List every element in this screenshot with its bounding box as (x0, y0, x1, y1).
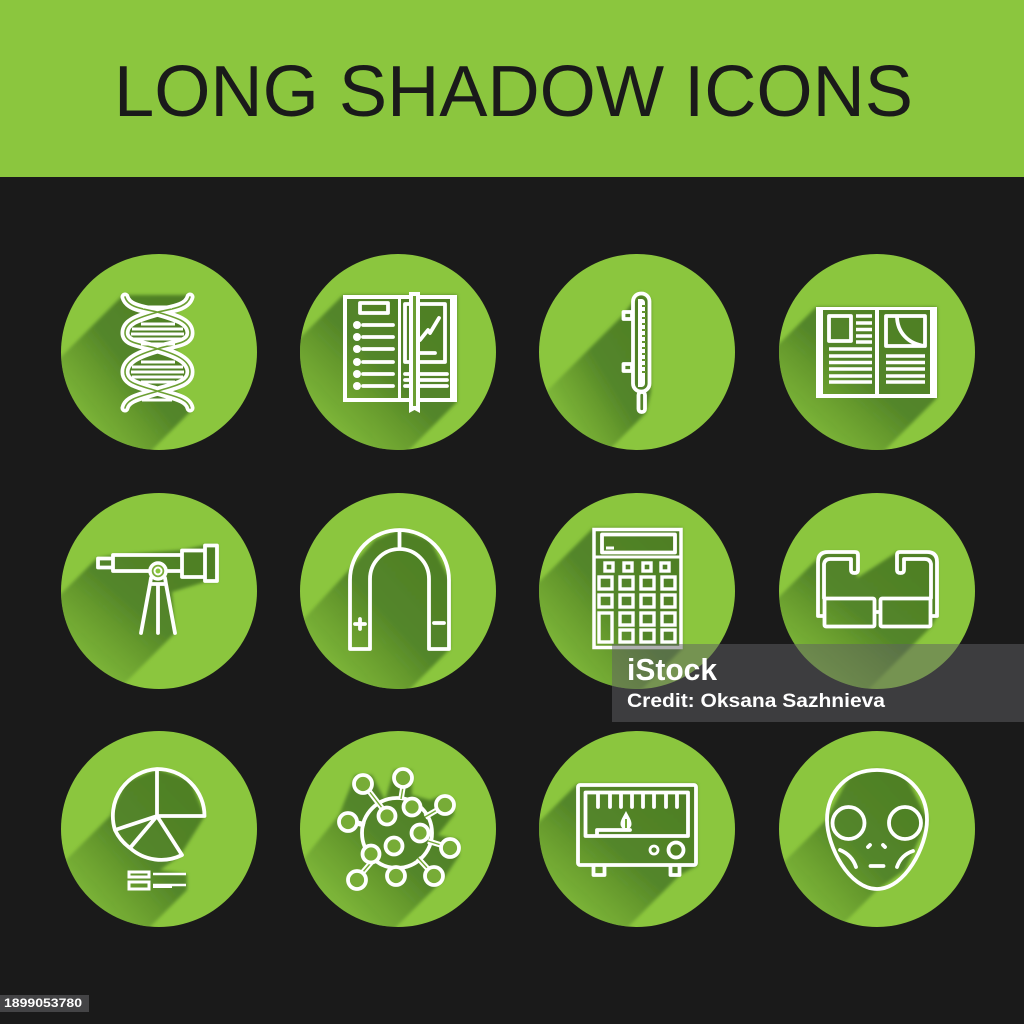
shadow clip: telescope (61, 543, 217, 683)
stock id label: 1899053780 (4, 996, 82, 1010)
icon: horseshoe magnet (350, 530, 449, 649)
shadow clip: calculator (539, 526, 684, 689)
icon: open book (816, 307, 937, 398)
green circle: alien (779, 731, 975, 927)
panel: alien (779, 731, 975, 927)
green circle: meter (539, 731, 735, 927)
green circle: magnet (300, 493, 496, 689)
icon: telescope (98, 546, 217, 633)
green circle: telescope (61, 493, 257, 689)
shadow clip: meter (539, 782, 699, 926)
panel: virus (300, 731, 496, 927)
icon: DNA helix (125, 297, 190, 408)
green circle: pie chart (61, 731, 257, 927)
panel: notebook (300, 254, 496, 450)
green circle: calculator (539, 493, 735, 689)
green circle: virus (300, 731, 496, 927)
shadow clip: DNA (61, 293, 192, 450)
icon: calculator (594, 530, 681, 648)
watermark banner (612, 644, 1024, 722)
shadow clip: glasses (779, 550, 938, 688)
green circle: glasses (779, 493, 975, 689)
icon: analog meter (578, 785, 696, 875)
panel: glasses (779, 493, 975, 689)
watermark credit: Credit: Oksana Sazhnieva (627, 691, 885, 712)
icon: virus (339, 769, 459, 889)
icon: pie chart with legend (113, 769, 204, 889)
stock id label (0, 995, 89, 1012)
icon: alien head (827, 770, 927, 889)
icon: notebook with pen (343, 292, 457, 413)
green circle: notebook (300, 254, 496, 450)
shadow clip: thermometer (548, 291, 653, 447)
shadow clip: open book (779, 305, 939, 450)
panel: magnet (300, 493, 496, 689)
shadow clip: alien (784, 768, 930, 922)
header band (0, 0, 1024, 177)
panel: DNA (61, 254, 257, 450)
shadow clip: pie chart (66, 771, 206, 926)
watermark logo: iStock (627, 652, 718, 687)
panel: open book (779, 254, 975, 450)
panel: thermometer (539, 254, 735, 450)
green circle: thermometer (539, 254, 735, 450)
panel: calculator (539, 493, 735, 689)
shadow clip: virus (304, 768, 461, 927)
icon: glasses (818, 552, 937, 626)
panel: meter (539, 731, 735, 927)
panel: pie chart (61, 731, 257, 927)
title: LONG SHADOW ICONS (114, 52, 913, 132)
shadow clip: notebook (300, 293, 459, 450)
green circle: DNA (61, 254, 257, 450)
panel: telescope (61, 493, 257, 689)
green circle: open book (779, 254, 975, 450)
icon: thermometer (624, 294, 650, 412)
shadow clip: magnet (304, 528, 452, 689)
